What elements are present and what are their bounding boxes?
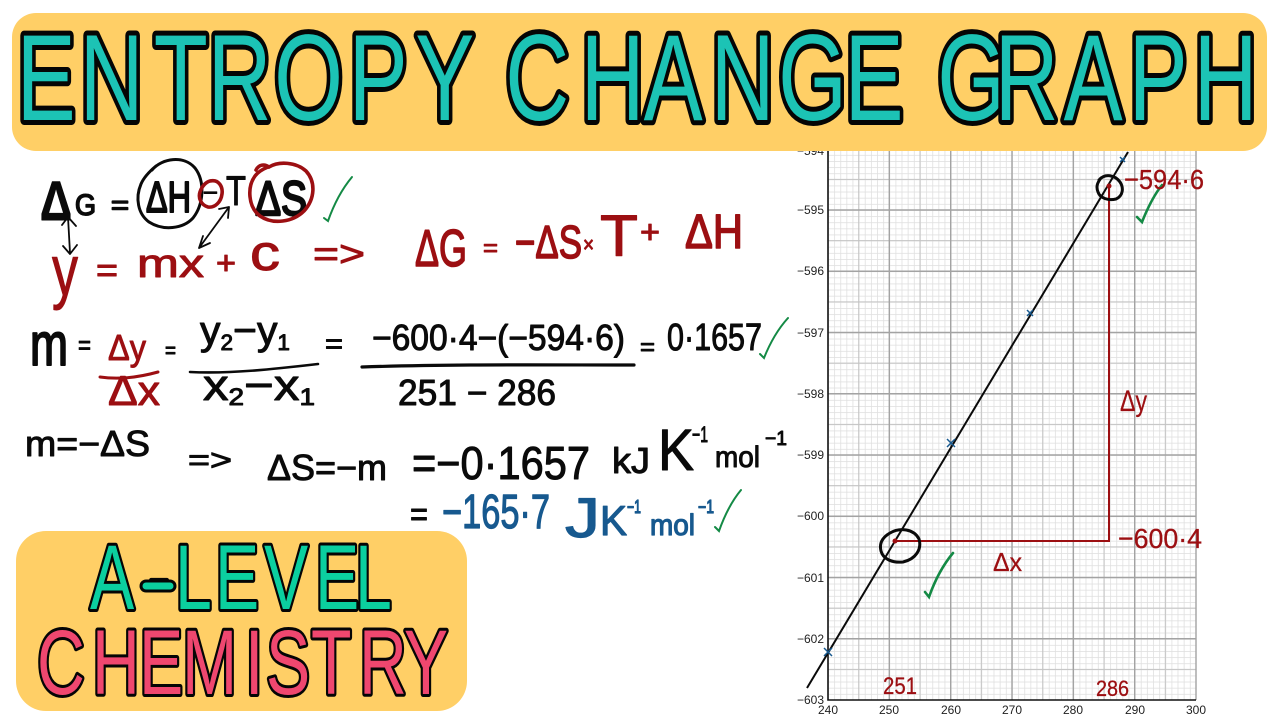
equation: Gibbs equation: ΔH — [146, 173, 191, 222]
equation: entropy from gradient: ΔS=−m — [267, 447, 387, 488]
equation: Gibbs equation: G — [75, 189, 96, 222]
equation: straight line form — [52, 225, 365, 311]
equation: entropy from gradient: => — [188, 444, 232, 477]
answer value in blue: mol — [650, 509, 695, 542]
equation: rearranged Gibbs — [415, 204, 743, 278]
x axis labels: 250 — [879, 703, 899, 717]
x axis labels: 260 — [941, 703, 961, 717]
gradient triangle — [895, 185, 1109, 541]
equation: straight line form: c — [250, 225, 280, 281]
tick mark — [324, 177, 352, 221]
red delta fraction: Δx — [108, 367, 160, 414]
equation: Gibbs equation: = — [111, 190, 129, 220]
equation: rearranged Gibbs: + — [640, 214, 660, 250]
badge line: A-LEVEL: A-LEVEL — [90, 525, 392, 629]
circle around enthalpy — [138, 160, 202, 228]
graph annotations: −594·6 — [1124, 164, 1204, 195]
graph annotations: 251 — [883, 673, 917, 700]
equation: entropy from gradient: kJ — [612, 440, 650, 481]
equation: rearranged Gibbs: ΔH — [685, 206, 743, 259]
graph tick marks — [925, 185, 1162, 597]
answer value in blue: J — [565, 486, 600, 549]
equation: rearranged Gibbs: ΔG — [415, 220, 467, 278]
answer value in blue: −1 — [627, 497, 641, 517]
graph annotations: 286 — [1096, 676, 1129, 701]
equation: gradient calculation: 2 — [220, 330, 233, 355]
badge line: CHEMISTRY: CHEMISTRY — [37, 610, 448, 714]
equation: gradient calculation — [30, 309, 788, 414]
graph annotations: Δx — [993, 547, 1022, 577]
data point crosses — [824, 157, 1125, 656]
x axis labels: 300 — [1186, 703, 1206, 717]
x axis labels: 280 — [1063, 703, 1083, 717]
equation: entropy from gradient: m=−ΔS — [25, 423, 150, 464]
panel: gradient graph — [797, 144, 1206, 717]
equation: straight line form: => — [313, 233, 365, 274]
equation: gradient calculation: m — [30, 311, 68, 378]
x axis labels: 240 — [818, 703, 838, 717]
equation: straight line form: mx — [137, 242, 204, 286]
equation: Gibbs equation: ΔS — [255, 173, 307, 226]
equation: entropy from gradient: K — [658, 418, 694, 483]
equation: entropy from gradient: mol — [715, 441, 760, 474]
line of best fit — [807, 152, 1128, 688]
equation: final answer — [410, 486, 741, 549]
y axis labels: −596 — [797, 264, 824, 278]
y axis labels: −595 — [797, 203, 824, 217]
y axis labels: −599 — [797, 448, 824, 462]
badge: A-level chemistry — [16, 525, 467, 714]
y axis labels: −603 — [797, 693, 824, 707]
tick mark — [760, 318, 788, 358]
y axis labels: −602 — [797, 632, 824, 646]
equation: gradient calculation: 0·1657 — [667, 317, 762, 359]
equation: final answer: = — [410, 496, 428, 534]
equation: straight line form: y — [52, 232, 78, 311]
equation: entropy from gradient — [25, 418, 787, 489]
y axis labels: −601 — [797, 571, 824, 585]
circled points — [880, 176, 1122, 562]
answer value in blue: −1 — [698, 497, 714, 517]
graph annotations: Δy — [1120, 385, 1147, 418]
equation: rearranged Gibbs: −ΔS — [515, 216, 582, 268]
equation: gradient calculation: = — [165, 338, 176, 363]
y axis labels: −600 — [797, 509, 824, 523]
equation: gradient calculation: −y — [233, 309, 277, 353]
equation: rearranged Gibbs: T — [600, 204, 638, 269]
equation: Gibbs equation: Δ — [40, 169, 72, 232]
equation: straight line form: = — [96, 252, 118, 290]
equation: entropy from gradient: −1 — [692, 422, 708, 447]
equation: gradient calculation: −x — [244, 361, 299, 410]
equation: Gibbs equation — [40, 160, 352, 254]
equation: gradient calculation: 2 — [229, 384, 244, 411]
y axis labels: −597 — [797, 326, 824, 340]
answer value in blue: K — [600, 497, 627, 544]
equation: rearranged Gibbs: × — [583, 232, 594, 257]
equation: gradient calculation: 251 − 286 — [398, 372, 556, 413]
badge hyphen stroke — [146, 580, 170, 592]
equation: gradient calculation: x — [203, 361, 225, 410]
x axis labels: 270 — [1002, 703, 1022, 717]
title banner — [12, 9, 1267, 151]
equation: Gibbs equation: − — [203, 180, 218, 205]
equation: gradient calculation: = — [78, 330, 91, 360]
equation: gradient calculation: = — [325, 328, 343, 359]
y axis labels: −594 — [797, 144, 824, 158]
equation: gradient calculation: 1 — [299, 384, 315, 411]
title text: ENTROPY CHANGE GRAPH — [17, 9, 1258, 146]
equation: straight line form: + — [216, 245, 236, 281]
correspondence arrows — [62, 207, 229, 254]
equation: gradient calculation: = — [640, 334, 655, 361]
equation: Gibbs equation: T — [226, 167, 246, 214]
y axis labels: −598 — [797, 387, 824, 401]
badge hyphen fill — [146, 582, 170, 590]
graph annotations — [883, 164, 1204, 701]
answer value in blue — [442, 486, 714, 549]
answer value in blue: −165·7 — [442, 486, 550, 539]
red delta fraction — [100, 327, 160, 414]
equation: entropy from gradient: =−0·1657 — [412, 437, 590, 489]
x axis labels: 290 — [1125, 703, 1145, 717]
y axis labels — [797, 144, 824, 707]
equation: entropy from gradient: −1 — [765, 428, 787, 450]
x axis labels — [818, 703, 1206, 717]
equation: rearranged Gibbs: = — [483, 235, 498, 262]
red delta fraction: Δy — [108, 327, 146, 368]
equation: gradient calculation: 1 — [277, 330, 290, 355]
tick mark — [715, 490, 741, 531]
graph annotations: −600·4 — [1118, 523, 1202, 554]
red circles around minus and entropy — [199, 163, 313, 221]
equation: gradient calculation: −600·4−(−594·6) — [372, 317, 625, 358]
equation: gradient calculation: y — [200, 309, 220, 353]
